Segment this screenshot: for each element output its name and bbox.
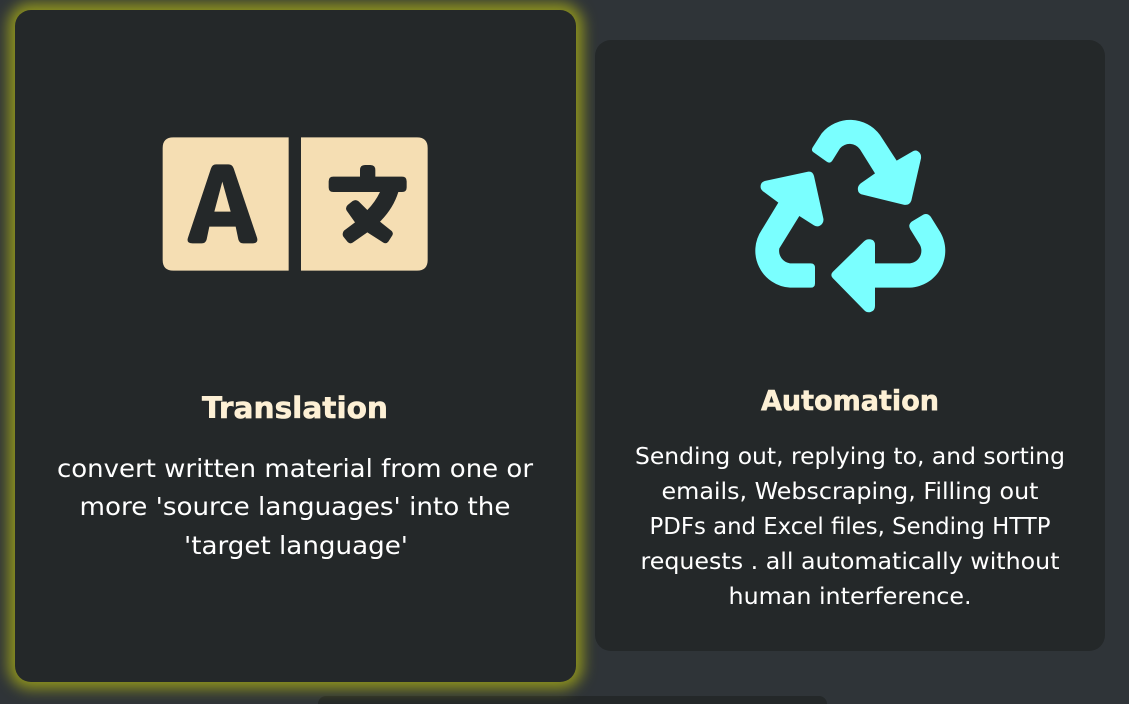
icon: translation xyxy=(163,137,428,271)
text: automation description: PDFs and Excel files, Sending HTTP xyxy=(650,512,1050,540)
panel: translation card with glow xyxy=(15,10,576,682)
text: translation description: more 'source languages' into the xyxy=(80,492,510,521)
text: translation description: convert written material from one or xyxy=(57,454,534,483)
panel: automation card xyxy=(595,40,1105,651)
heading: Automation: Automation xyxy=(761,384,939,417)
icon: recycle arrows xyxy=(755,120,945,312)
panel: third card, partly visible xyxy=(318,696,827,704)
text: translation description: 'target language' xyxy=(184,531,408,560)
text: automation description: Sending out, replying to, and sorting xyxy=(635,442,1065,470)
text: automation description xyxy=(635,442,1065,610)
heading: Translation: Translation xyxy=(202,391,388,425)
text: translation description xyxy=(57,454,534,560)
text: automation description: human interference. xyxy=(728,582,972,610)
text: automation description: requests . all automatically without xyxy=(640,547,1060,575)
text: automation description: emails, Webscraping, Filling out xyxy=(662,477,1038,505)
